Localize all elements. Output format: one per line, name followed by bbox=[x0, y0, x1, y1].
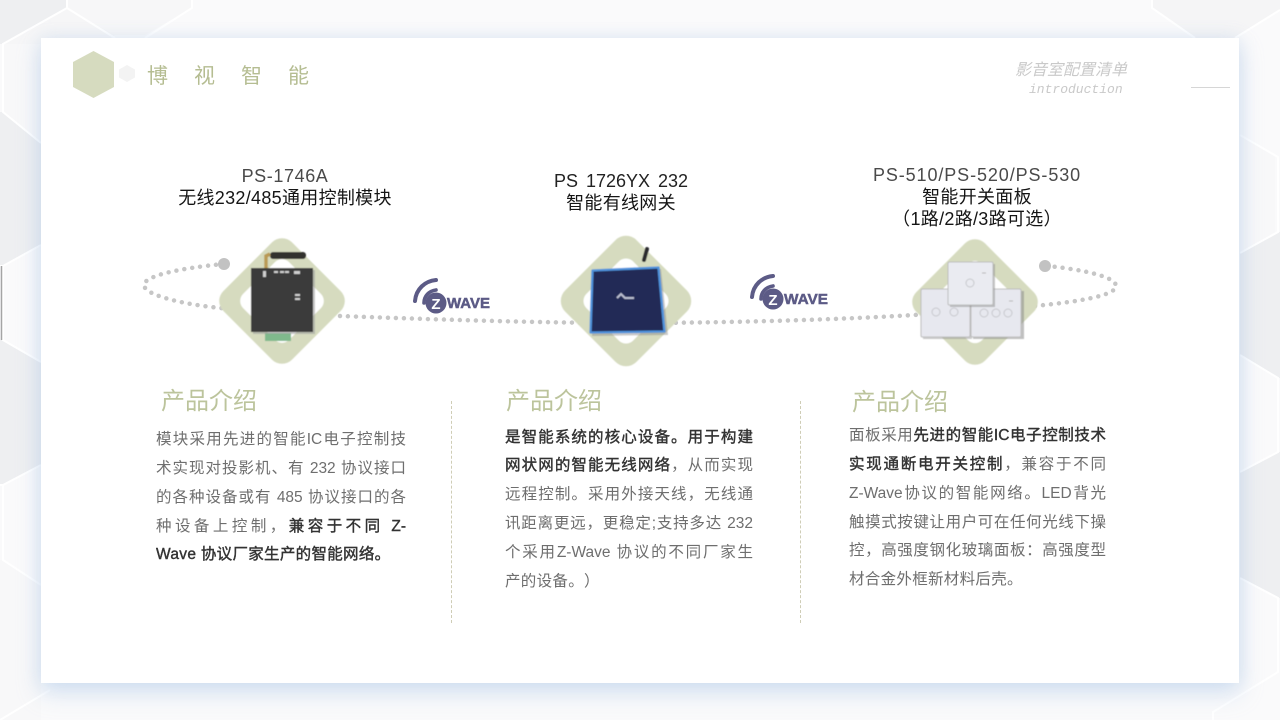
text: product intro 1: Wave 协议厂家生产的智能网络。 bbox=[156, 546, 390, 563]
section title: 影音室配置清单 bbox=[1015, 62, 1127, 79]
logo: Z-Wave right: Z bbox=[768, 292, 778, 309]
title: brand name: 博视智能 bbox=[147, 65, 335, 88]
device 3: smart switch panels bbox=[906, 233, 1044, 371]
text: product intro 2: 个采用Z-Wave 协议的不同厂家生 bbox=[505, 544, 753, 561]
logo: Z-Wave right bbox=[752, 276, 828, 310]
header rule bbox=[1191, 87, 1230, 88]
product name: PS-510/PS-520/PS-530: （1路/2路/3路可选） bbox=[892, 209, 1062, 229]
product name: PS 1726YX 232 bbox=[554, 171, 688, 213]
text: product intro 3: Z-Wave协议的智能网络。LED背光 bbox=[849, 485, 1106, 502]
text: product intro 1 bbox=[156, 430, 406, 563]
text: product intro 2: 产的设备。） bbox=[505, 573, 600, 590]
text: product intro 2: 讯距离更远，更稳定;支持多达 232 bbox=[505, 515, 753, 532]
heading: product intro 1: 产品介绍 bbox=[161, 388, 257, 415]
logo: Z-Wave left: WAVE bbox=[447, 295, 490, 312]
product name: PS-510/PS-520/PS-530: PS-510/PS-520/PS-530 bbox=[873, 165, 1081, 185]
divider: right column bbox=[800, 401, 801, 623]
section subtitle: introduction bbox=[1029, 82, 1123, 96]
text: product intro 3 bbox=[849, 426, 1106, 588]
brand header bbox=[73, 51, 335, 98]
heading: product intro 2: 产品介绍 bbox=[506, 388, 602, 415]
product name: PS 1726YX 232: 智能有线网关 bbox=[566, 193, 676, 213]
product name: PS-1746A: 无线232/485通用控制模块 bbox=[178, 188, 392, 208]
product name: PS 1726YX 232: PS 1726YX 232 bbox=[554, 171, 688, 191]
product name: PS-1746A bbox=[178, 166, 392, 208]
section tag: top right bbox=[1015, 61, 1230, 96]
text: product intro 1: 种设备上控制，兼容于不同 Z- bbox=[156, 518, 406, 535]
text: product intro 3: 面板采用先进的智能IC电子控制技术 bbox=[849, 427, 1106, 444]
logo: Z-Wave left: Z bbox=[431, 296, 441, 313]
text: product intro 1: 的各种设备或有 485 协议接口的各 bbox=[156, 489, 406, 506]
product name: PS-510/PS-520/PS-530: 智能开关面板 bbox=[922, 187, 1032, 207]
divider: left column bbox=[451, 401, 452, 623]
text: product intro 2: 是智能系统的核心设备。用于构建 bbox=[505, 428, 753, 446]
text: product intro 3: 材合金外框新材料后壳。 bbox=[849, 571, 1023, 588]
text: product intro 3: 控，高强度钢化玻璃面板：高强度型 bbox=[849, 542, 1106, 559]
product name: PS-1746A: PS-1746A bbox=[242, 166, 328, 186]
product name: PS-510/PS-520/PS-530 bbox=[873, 165, 1081, 229]
logo: Z-Wave left bbox=[415, 280, 490, 314]
text: product intro 2: 远程控制。采用外接天线，无线通 bbox=[505, 486, 753, 503]
text: product intro 2 bbox=[505, 428, 753, 590]
text: product intro 1: 术实现对投影机、有 232 协议接口 bbox=[156, 460, 406, 477]
text: product intro 3: 实现通断电开关控制，兼容于不同 bbox=[849, 456, 1106, 473]
device 1: wireless control module bbox=[213, 232, 351, 370]
icon: header hexagons bbox=[73, 51, 135, 98]
text: product intro 2: 网状网的智能无线网络，从而实现 bbox=[505, 457, 753, 474]
dotted connection line bbox=[144, 258, 1116, 323]
heading: product intro 3: 产品介绍 bbox=[852, 389, 948, 416]
text: product intro 1: 模块采用先进的智能IC电子控制技 bbox=[156, 431, 406, 448]
text: product intro 3: 触摸式按键让用户可在任何光线下操 bbox=[849, 514, 1106, 531]
device 2: wired gateway bbox=[555, 230, 697, 372]
logo: Z-Wave right: WAVE bbox=[784, 291, 828, 308]
